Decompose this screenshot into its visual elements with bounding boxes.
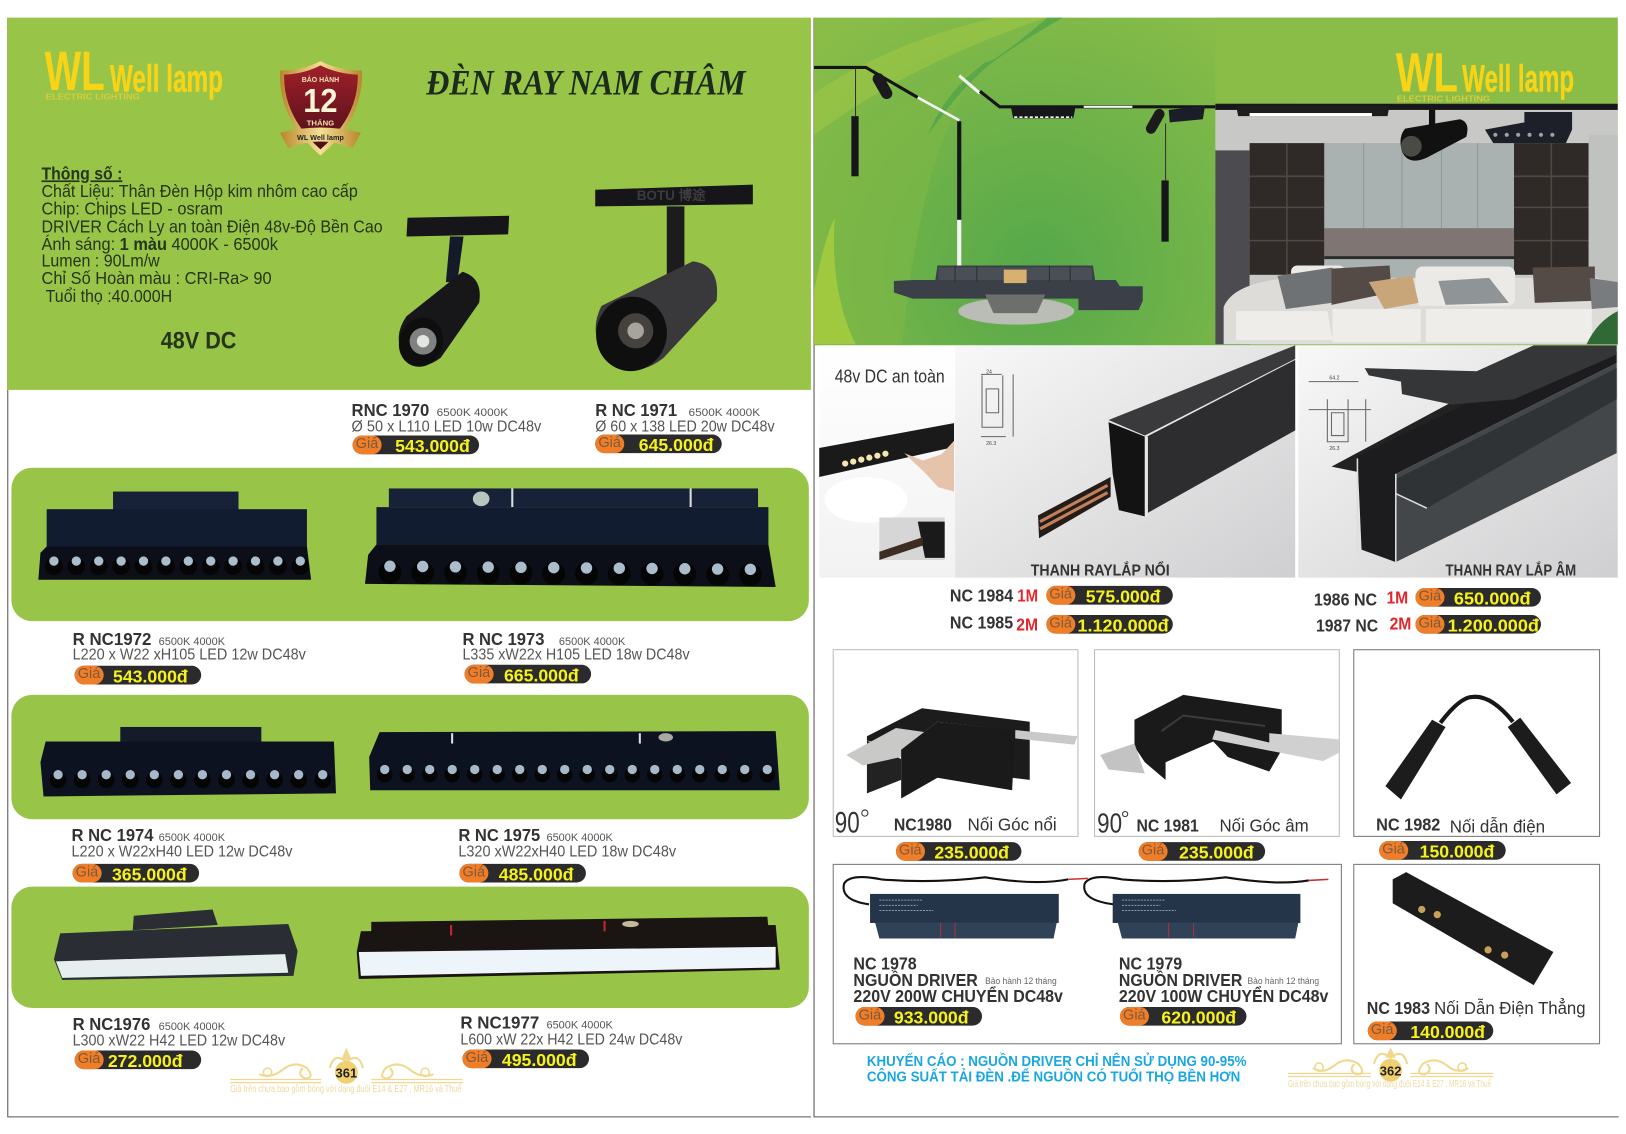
rail prices: NC 1985 (950, 613, 1173, 636)
icon: linear lamp NC1974 (40, 727, 336, 796)
product label: R NC 1975: 6500K 4000K (546, 832, 614, 844)
product label: R NC 1974 (72, 825, 293, 884)
rail prices: 1986 NC (1314, 588, 1541, 610)
page number ornament 362: Giá trên chưa bao gồm bóng với dạng đuôi E14 & E27 , MR16 và Thuế (1288, 1078, 1491, 1090)
left page frame (8, 18, 811, 1117)
rail prices: NC 1985: NC 1985 (950, 613, 1014, 632)
logo: Well lamp right: WL (1396, 40, 1458, 103)
logo: Well lamp (45, 39, 223, 102)
text: NC 1978: NGUỒN DRIVER (853, 971, 978, 990)
icon: warranty badge: WL Well lamp (297, 133, 344, 142)
panel: 48v DC safe (819, 345, 955, 578)
track lights illustration (814, 67, 1215, 267)
page number ornament 361 (230, 1047, 462, 1095)
product label: RNC 1970: Ø 50 x L110 LED 10w DC48v (352, 418, 542, 435)
rail prices: 1986 NC: 1986 NC (1314, 591, 1377, 610)
box: NC 1983: Nối Dẫn Điện Thẳng (1434, 999, 1586, 1018)
panel: right header illustration (814, 18, 1618, 345)
rail prices: 1987 NC: 1.200.000đ (1448, 616, 1539, 636)
callout: driver warning: KHUYẾN CÁO : NGUỒN DRIVER CHỈ NÊN SỬ DỤNG 90-95% (867, 1052, 1246, 1070)
product label: R NC 1975: Giá (462, 864, 486, 880)
text block: specifications (41, 164, 383, 306)
box: NC1980: Nối Góc nổi (968, 816, 1057, 835)
price: NC1981: Giá (1142, 843, 1165, 859)
product label: R NC 1974: L220 x W22xH40 LED 12w DC48v (72, 844, 293, 861)
text: NC 1978: 933.000đ (894, 1008, 969, 1028)
dimension drawing: 24 (986, 369, 992, 375)
text block: specifications: Lumen : 90Lm/w (41, 252, 160, 271)
rail prices: 1987 NC (1316, 613, 1541, 636)
dimension drawing: 26.3 (986, 441, 996, 447)
product label: R NC1977: 6500K 4000K (546, 1020, 614, 1032)
product label: R NC1977: L600 xW 22x H42 LED 24w DC48v (460, 1031, 683, 1048)
rail prices: NC 1984: 1M (1017, 585, 1038, 605)
panel: surface rail (955, 345, 1295, 580)
text: NC 1978 (853, 955, 1063, 1028)
box: NC 1983 (1354, 864, 1600, 1044)
rail prices: NC 1984: NC 1984 (950, 586, 1014, 605)
icon: linear lamp NC1977 (357, 917, 780, 979)
product label: R NC 1971: 6500K 4000K (689, 407, 761, 419)
page number ornament 362 (1288, 1047, 1493, 1090)
box: NC1981: 90 (1097, 808, 1122, 839)
price: NC1980: 235.000đ (934, 843, 1009, 863)
price: NC1982 (1379, 841, 1506, 862)
product label: R NC1972 (73, 629, 306, 686)
product label: RNC 1970: RNC 1970 (352, 400, 430, 420)
product label: R NC 1973 (462, 629, 690, 685)
product label: R NC 1971 (595, 400, 775, 455)
text: NC 1978: NC 1978 (853, 955, 917, 974)
product label: R NC1972: R NC1972 (73, 629, 152, 649)
product label: RNC 1970: Giá (356, 436, 379, 452)
icon: linear lamp NC1973 (365, 488, 776, 587)
product label: R NC1976: 6500K 4000K (159, 1021, 226, 1033)
callout: driver warning (867, 1052, 1246, 1086)
product label: R NC 1974: R NC 1974 (72, 825, 154, 845)
right page frame (814, 18, 1619, 1117)
price: NC1982: 150.000đ (1420, 842, 1495, 862)
box: NC1980: NC1980 (894, 816, 952, 835)
text block: specifications: DRIVER Cách Ly an toàn Điện 48v-Độ Bền Cao (41, 217, 383, 236)
product label: R NC1976: 272.000đ (108, 1051, 183, 1071)
room photo (1215, 104, 1618, 344)
product label: R NC 1975: R NC 1975 (458, 825, 540, 845)
callout: driver warning: CÔNG SUẤT TẢI ĐÈN .ĐỂ NGUỒN CÓ TUỔI THỌ BỀN HƠN (867, 1068, 1240, 1086)
text block: specifications: Chất Liệu: Thân Đèn Hộp kim nhôm cao cấp (41, 182, 358, 201)
product label: R NC 1974: 365.000đ (112, 864, 187, 884)
product label: R NC 1975: L320 xW22xH40 LED 18w DC48v (458, 844, 676, 861)
icon: driver NC 1979 (1084, 877, 1328, 939)
rail prices: 1987 NC: 2M (1390, 613, 1411, 633)
text block: specifications: Ánh sáng: 1 màu 4000K - 6500k (41, 235, 278, 254)
product label: R NC 1975: 485.000đ (499, 864, 574, 884)
product label: R NC1976: L300 xW22 H42 LED 12w DC48v (73, 1032, 285, 1049)
sofa illustration (894, 265, 1143, 325)
rail prices: NC 1985: 2M (1016, 615, 1038, 635)
panel: band 2 (11, 695, 809, 819)
box: NC1981: Nối Góc âm (1220, 817, 1309, 836)
icon: warranty badge: BẢO HÀNH (302, 75, 339, 84)
box: NC1980: 90 (835, 807, 860, 840)
caption: surface rail: THANH RAYLẮP NỔI (1031, 562, 1170, 580)
product label: R NC1972: 6500K 4000K (159, 636, 226, 648)
icon: warranty badge (280, 61, 362, 156)
dimension drawing: 26.3 (1329, 446, 1340, 452)
rail prices: NC 1984: 575.000đ (1086, 587, 1161, 607)
voltage label: 48V DC (161, 327, 236, 354)
price: NC1980: Giá (899, 843, 923, 859)
text block: specifications: Chỉ Số Hoàn màu : CRI-Ra> 90 (41, 269, 272, 288)
page number ornament 362: 362 (1380, 1063, 1401, 1078)
box: NC 1983: Giá (1371, 1022, 1394, 1038)
product label: RNC 1970 (352, 400, 542, 456)
product label: R NC1972: L220 x W22 xH105 LED 12w DC48v (73, 647, 306, 664)
text: NC 1979: NGUỒN DRIVER (1119, 971, 1242, 990)
icon: small spot lamp (392, 216, 509, 373)
rail prices: NC 1985: Giá (1049, 615, 1073, 631)
product label: R NC1977: Giá (466, 1050, 489, 1066)
product label: R NC1972: Giá (78, 666, 101, 682)
panel: left header (7, 18, 811, 390)
panel: band 1 (11, 468, 809, 621)
icon: linear lamp NC1972 (38, 492, 311, 580)
box: drivers (833, 864, 1341, 1044)
icon: large spot lamp: BOTU 博途 (637, 187, 706, 203)
box: NC1981 (1095, 650, 1339, 839)
icon: linear lamp NC1975 (369, 731, 780, 790)
product label: R NC 1975 (458, 825, 676, 884)
dimension drawing (1309, 376, 1371, 452)
product label: R NC 1973: 6500K 4000K (559, 636, 626, 648)
rail prices: 1987 NC: 1987 NC (1316, 617, 1378, 636)
box: NC 1983: NC 1983 (1367, 999, 1430, 1018)
box: NC 1983: 140.000đ (1410, 1022, 1485, 1042)
price: NC1980 (896, 842, 1021, 863)
text: NC 1978: Giá (859, 1007, 882, 1023)
text: NC 1979 (1119, 955, 1329, 1028)
product label: R NC1977: R NC1977 (460, 1013, 539, 1033)
product label: R NC1976: R NC1976 (73, 1014, 151, 1034)
icon: large spot lamp (588, 185, 753, 379)
text: NC 1979: Bảo hành 12 tháng (1247, 976, 1319, 986)
icon: driver NC 1978 (844, 877, 1088, 939)
text block: specifications: Thông số : (41, 164, 122, 183)
rail prices: NC 1984 (950, 585, 1173, 607)
price: NC1981 (1139, 842, 1265, 863)
text: NC 1978: 220V 200W CHUYỂN DC48v (853, 987, 1063, 1006)
product label: R NC 1973: L335 xW22x H105 LED 18w DC48v (462, 647, 690, 664)
product label: R NC1977 (460, 1013, 683, 1070)
product label: R NC 1971: R NC 1971 (595, 400, 677, 420)
product label: R NC 1974: 6500K 4000K (159, 832, 226, 844)
panel: band 3 (11, 887, 809, 1008)
logo: Well lamp right: ELECTRIC LIGHTING (1397, 94, 1490, 104)
product label: R NC 1971: Giá (598, 435, 622, 451)
rail prices: NC 1985: 1.120.000đ (1077, 616, 1169, 636)
rail prices: 1986 NC: 650.000đ (1454, 589, 1531, 609)
rail prices: NC 1984: Giá (1049, 586, 1073, 602)
product label: RNC 1970: 6500K 4000K (437, 407, 509, 419)
page number ornament 361: Giá trên chưa bao gồm bóng với dạng đuôi E14 & E27 , MR16 và Thuế (230, 1083, 462, 1095)
logo: Well lamp right (1396, 40, 1574, 104)
product label: R NC1976 (73, 1014, 285, 1071)
logo: Well lamp: WL (45, 39, 105, 102)
box: NC1980 (833, 650, 1078, 840)
product label: R NC 1973: R NC 1973 (462, 629, 545, 649)
logo: Well lamp: Well lamp (110, 57, 223, 100)
icon: warranty badge: 12 (303, 83, 338, 120)
text: NC 1978: Bảo hành 12 tháng (985, 976, 1057, 986)
price: NC1982: Giá (1382, 841, 1406, 857)
product label: R NC 1973: Giá (468, 665, 491, 681)
title: ĐÈN RAY NAM CHÂM (425, 62, 747, 102)
box: NC1982: Nối dẫn điện (1450, 818, 1545, 837)
price: NC1981: 235.000đ (1179, 843, 1254, 863)
icon: linear lamp NC1976 (54, 909, 298, 980)
caption: 48v DC: 48v DC an toàn (835, 366, 945, 387)
text: NC 1979: 620.000đ (1161, 1008, 1236, 1028)
product label: RNC 1970: 543.000đ (395, 436, 470, 456)
rail prices: 1986 NC: Giá (1419, 588, 1442, 604)
product label: R NC 1974: Giá (76, 864, 99, 880)
box: NC1981: NC 1981 (1137, 817, 1199, 836)
icon: warranty badge: THÁNG (307, 118, 334, 127)
product label: R NC1972: 543.000đ (113, 666, 188, 686)
panel: recessed rail (1298, 345, 1618, 580)
text: NC 1979: Giá (1123, 1007, 1147, 1023)
product label: R NC 1971: 645.000đ (639, 435, 714, 455)
box: NC1982: NC 1982 (1376, 816, 1440, 835)
rail prices: 1986 NC: 1M (1386, 588, 1408, 608)
logo: Well lamp: ELECTRIC LIGHTING (46, 92, 140, 102)
dimension drawing: 64.2 (1329, 376, 1340, 382)
product label: R NC1977: 495.000đ (502, 1050, 577, 1070)
text: NC 1979: NC 1979 (1119, 955, 1182, 974)
product label: R NC 1973: 665.000đ (504, 665, 579, 685)
text block: specifications: Tuổi thọ :40.000H (46, 287, 172, 306)
rail prices: 1987 NC: Giá (1419, 615, 1442, 631)
product label: R NC 1971: Ø 60 x 138 LED 20w DC48v (595, 418, 775, 435)
product label: R NC1976: Giá (78, 1051, 101, 1067)
text: NC 1979: 220V 100W CHUYỂN DC48v (1119, 987, 1329, 1006)
box: NC1982 (1354, 650, 1600, 837)
dimension drawing (981, 369, 1013, 447)
page number ornament 361: 361 (336, 1065, 357, 1080)
text block: specifications: Chip: Chips LED - osram (41, 200, 223, 219)
caption: recessed rail: THANH RAY LẮP ÂM (1446, 562, 1576, 580)
